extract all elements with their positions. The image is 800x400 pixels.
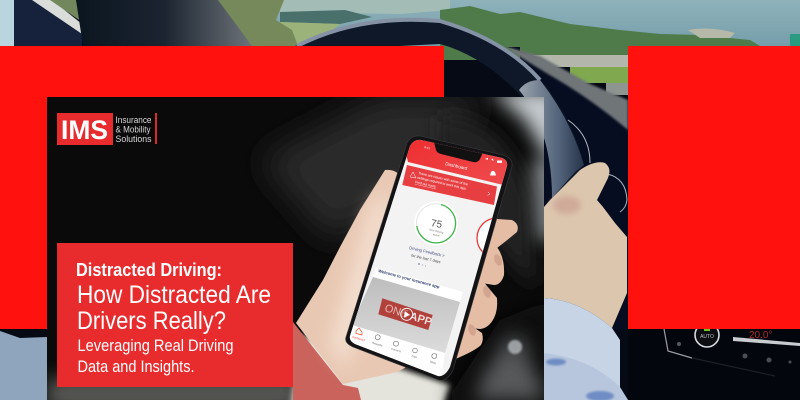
tab: dashboard: Dashboard [352,335,366,342]
logo letters: IMS [61,115,108,145]
title card [57,243,293,387]
tab bar [350,326,445,376]
phone body [346,136,512,380]
palm [296,170,406,384]
shirt cuff [544,298,628,400]
video logo [378,298,433,330]
score gauge: Your driving [429,227,444,235]
title: Drivers Really? [77,307,226,335]
mirror and door [0,0,82,46]
title: How Distracted Are [77,281,271,309]
carousel dots [418,263,426,267]
video logo: APP [408,310,433,328]
title [77,281,271,335]
icon: bell [490,171,496,176]
logo wordmark: Insurance [116,115,152,125]
logo rule [155,113,157,144]
warning banner [402,165,497,205]
phone screen [350,140,508,376]
subtitle [78,336,234,376]
instrument cluster rings [568,120,627,212]
red panel: left [0,46,444,329]
dashboard top [507,47,628,330]
logo wordmark: Solutions [116,134,152,144]
left sleeve [0,331,47,400]
landscape through windscreen [210,0,800,95]
warning text: There are issues with some of the [418,171,468,186]
app notch [434,143,482,162]
logo mark [57,113,113,145]
tab: rewards: Rewards [372,341,384,348]
blurred car interior [47,90,560,400]
kicker: Distracted Driving: [76,260,222,280]
driving feedback link: Driving Feedback > [409,245,446,258]
dashboard console: 20.0° [749,330,772,341]
icon: chevron [488,192,490,196]
sweater cuff [293,322,361,400]
rim highlight [297,20,540,80]
logo: IMS [57,113,157,145]
welcome strip [373,267,463,302]
phone [345,136,512,380]
tab: trips: Trips [411,354,418,359]
video logo: ONE [383,302,409,321]
windscreen pillar [76,0,252,46]
dashboard title: Dashboard [445,161,468,171]
status icons [485,158,502,163]
video thumbnail [352,277,460,353]
app header [406,140,508,185]
status bar time: 9:41 [424,145,431,150]
icon: play button [401,308,413,320]
welcome heading: Welcome to your insurance app [378,268,441,289]
red panel: right [628,46,800,329]
fingers [456,219,518,358]
dashboard console: AUTO [700,334,714,340]
steering wheel rim [295,18,584,205]
logo wordmark: & Mobility [116,124,151,134]
dashboard edge [507,47,628,130]
period label: for the last 7 days [411,254,441,264]
second gauge [476,218,492,253]
tab: more: More [430,360,437,365]
score gauge: score [432,232,440,238]
shirt pattern [544,353,628,400]
palm highlight [330,190,392,368]
warning text: settings required to work this app. [417,176,467,191]
subtitle: Leveraging Real Driving [78,336,234,355]
logo wordmark [116,115,152,144]
rim side [519,80,584,198]
photo panel: hand holding phone [47,90,560,400]
driver hand [544,162,627,328]
score gauge: 75 [430,218,443,231]
score gauge [414,201,458,245]
dashboard console [628,323,800,400]
tab: connect: Connect [391,347,402,353]
knuckle shade [553,196,581,214]
subtitle: Data and Insights. [78,357,194,376]
icon: warning triangle [410,172,416,178]
warning text: Find out more. [415,180,437,189]
